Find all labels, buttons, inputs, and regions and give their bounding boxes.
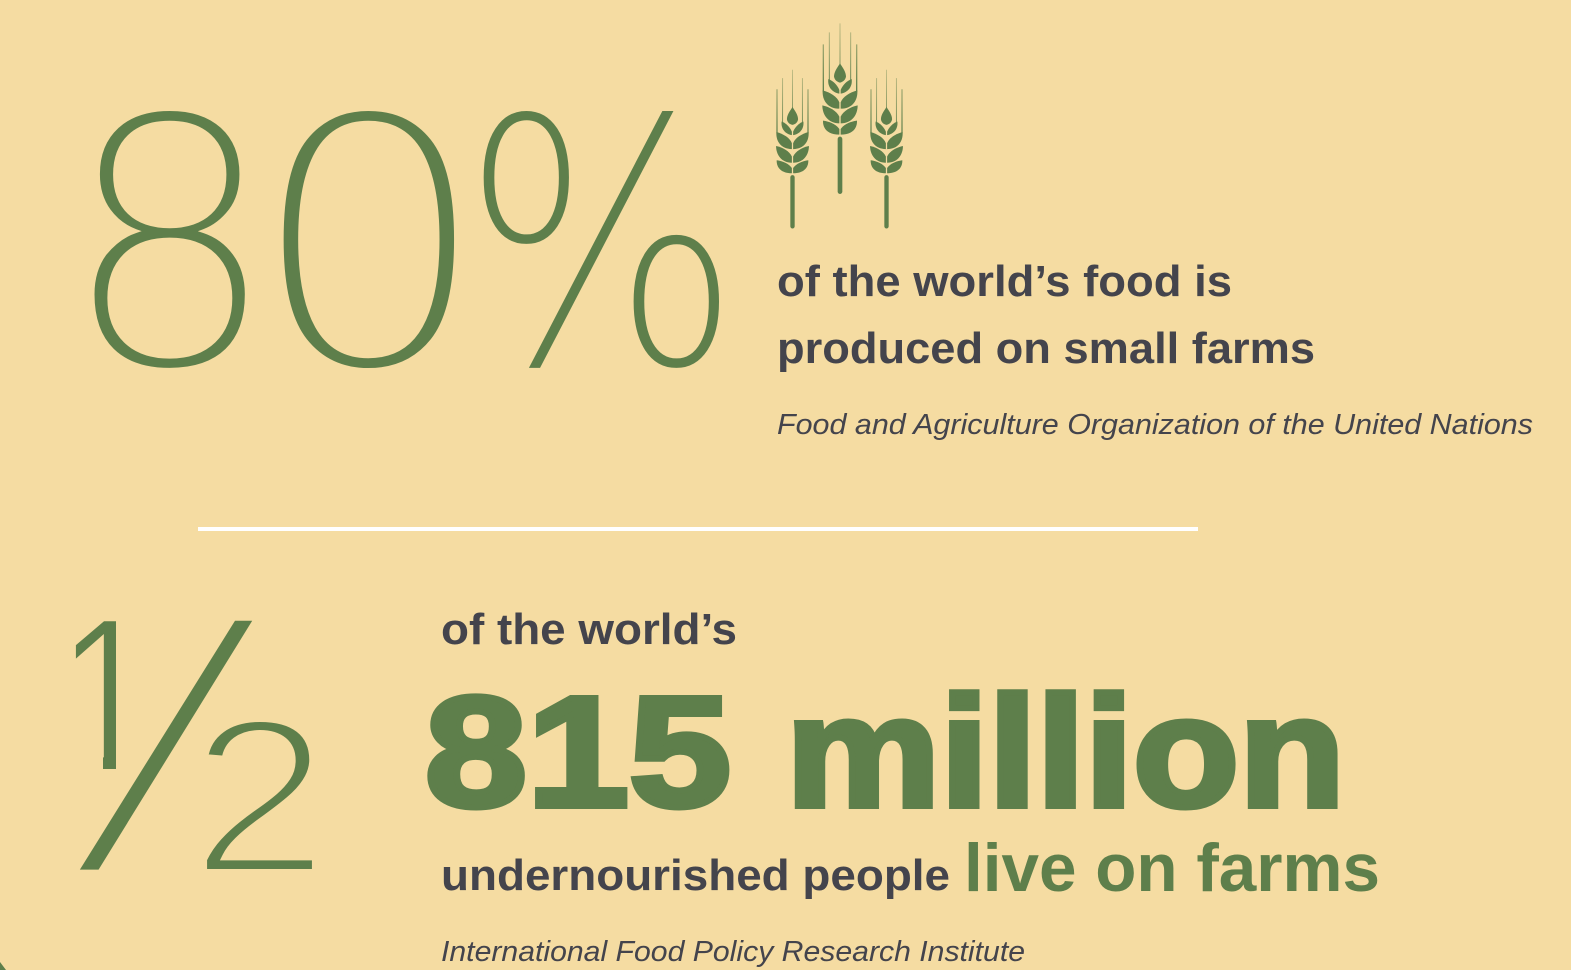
stat text: 80% description: of the world’s food is	[777, 257, 1232, 306]
big stat: 80%: %	[460, 46, 743, 447]
headline: 815 million: million	[786, 665, 1345, 840]
source: IFPRI: International Food Policy Research Institute	[441, 936, 1025, 968]
source: FAO: Food and Agriculture Organization of the United Nations	[777, 409, 1533, 441]
headline: 815 million	[425, 665, 1345, 840]
stat text: 80% description: produced on small farms	[777, 324, 1315, 373]
big stat: one half: 2	[190, 673, 329, 921]
headline: 815 million: 815	[425, 665, 731, 840]
big stat: 80%	[60, 46, 743, 447]
big stat: 80%: 8	[60, 46, 280, 447]
stat text: of the world's: of the world’s	[441, 605, 737, 654]
stat text: 80% description	[777, 257, 1315, 373]
corner mark	[0, 962, 6, 970]
icon: three wheat stalks	[776, 23, 903, 228]
stat text: undernourished people live on farms: live on farms	[964, 830, 1380, 906]
big stat: one half: 1	[57, 572, 157, 820]
stat text: undernourished people live on farms	[441, 830, 1380, 906]
big stat: one half	[76, 620, 312, 870]
big stat: 80%: 0	[247, 46, 492, 447]
stat text: undernourished people live on farms: undernourished people	[441, 851, 950, 900]
big stat: one half: /	[50, 545, 285, 954]
